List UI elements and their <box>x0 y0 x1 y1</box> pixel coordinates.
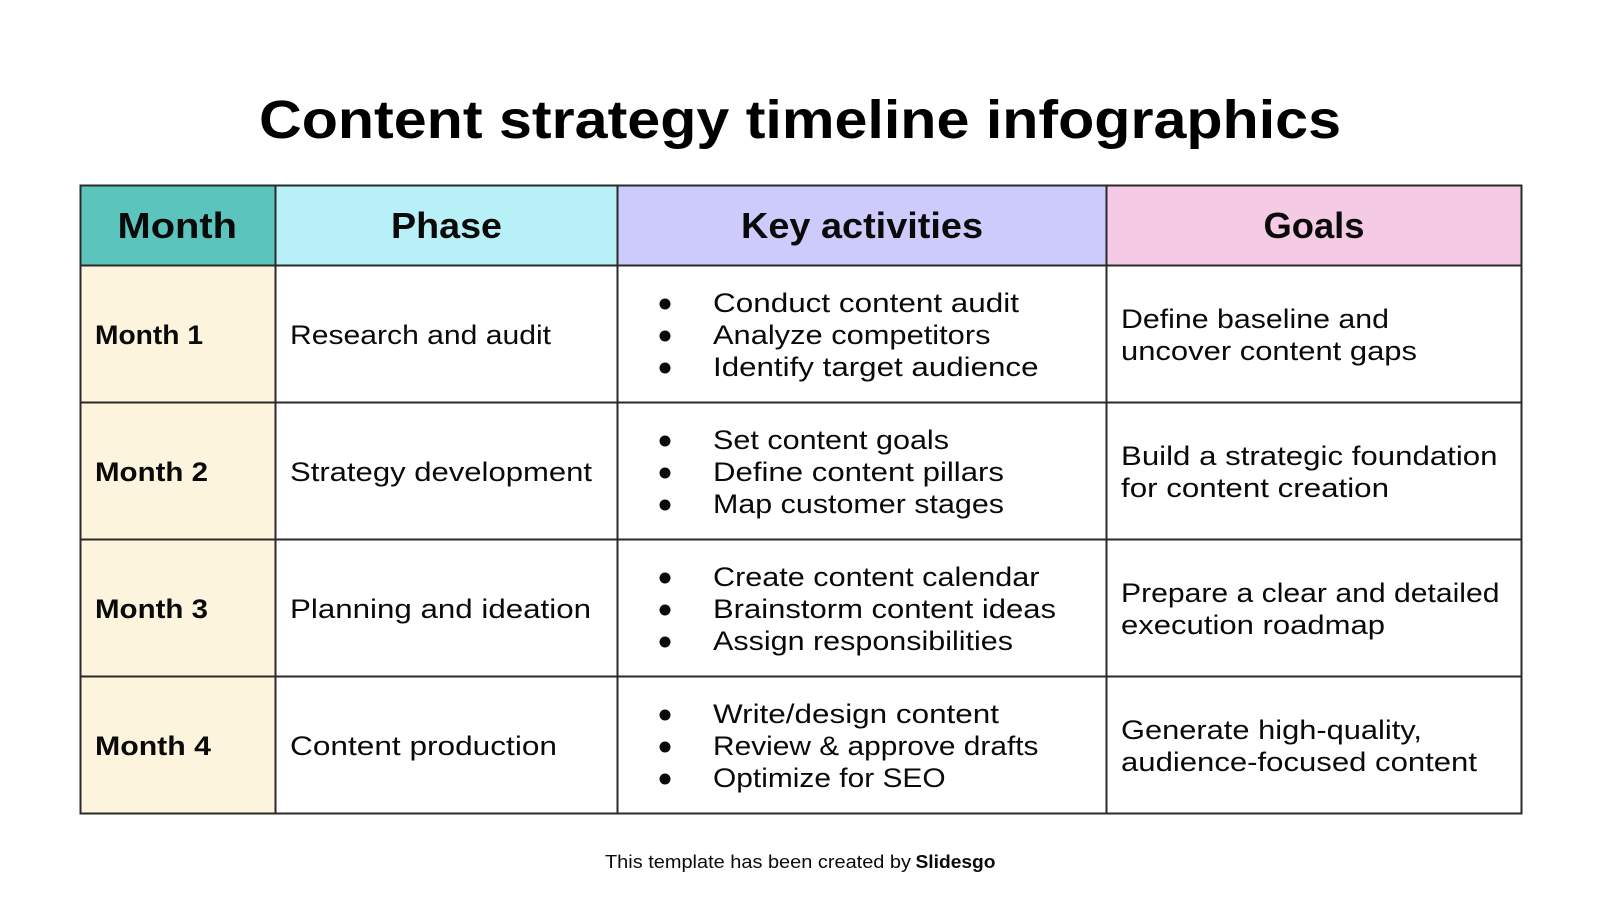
row: Month 2 <box>95 425 1498 519</box>
row: Month 4: Write/design content <box>713 699 1000 729</box>
timeline table <box>80 185 1522 814</box>
row: Month 1: Conduct content audit <box>713 288 1020 318</box>
header cell: Month <box>80 185 275 265</box>
header cell: Goals <box>1106 185 1521 265</box>
row: Month 2: Define content pillars <box>713 457 1004 487</box>
header cell: Key activities <box>617 185 1106 265</box>
footer credit: This template has been created by <box>605 852 911 872</box>
row: Month 3: Planning and ideation <box>290 594 591 624</box>
row: Month 3 <box>95 562 1500 656</box>
row: Month 1: uncover content gaps <box>1121 336 1417 366</box>
row: Month 3: Month 3 <box>95 594 208 624</box>
header cell: Goals: Goals <box>1264 205 1364 246</box>
row: Month 1: Define baseline and <box>1121 304 1389 334</box>
row: Month 4: Review & approve drafts <box>713 731 1038 761</box>
row: Month 1: Analyze competitors <box>713 320 990 350</box>
row: Month 4: audience-focused content <box>1121 747 1478 777</box>
row: Month 2: Set content goals <box>713 425 949 455</box>
row: Month 2: for content creation <box>1121 473 1389 503</box>
row: Month 3: Brainstorm content ideas <box>713 594 1056 624</box>
row: Month 1: Identify target audience <box>713 352 1038 382</box>
row: Month 2: Strategy development <box>290 457 593 487</box>
row: Month 4: Optimize for SEO <box>713 763 946 793</box>
row: Month 3: Create content calendar <box>713 562 1040 592</box>
row: Month 1: Month 1 <box>95 320 203 350</box>
month column background <box>80 265 275 813</box>
row: Month 4: Generate high-quality, <box>1121 715 1422 745</box>
row: Month 2: Build a strategic foundation <box>1121 441 1498 471</box>
row: Month 4: Content production <box>290 731 557 761</box>
row: Month 3: execution roadmap <box>1121 610 1385 640</box>
header cell: Month: Month <box>118 205 237 246</box>
row: Month 1: Research and audit <box>290 320 552 350</box>
footer credit: Slidesgo <box>916 852 996 872</box>
row: Month 3: Prepare a clear and detailed <box>1121 578 1500 608</box>
header cell: Phase: Phase <box>391 205 502 246</box>
header row <box>80 185 1521 265</box>
row: Month 1 <box>95 288 1417 382</box>
row: Month 4: Month 4 <box>95 731 211 761</box>
row: Month 4 <box>95 699 1478 793</box>
title: Content strategy timeline infographics <box>259 90 1341 150</box>
row: Month 2: Map customer stages <box>713 489 1004 519</box>
row: Month 2: Month 2 <box>95 457 208 487</box>
header cell: Phase <box>275 185 617 265</box>
row: Month 3: Assign responsibilities <box>713 626 1013 656</box>
header cell: Key activities: Key activities <box>741 205 983 246</box>
